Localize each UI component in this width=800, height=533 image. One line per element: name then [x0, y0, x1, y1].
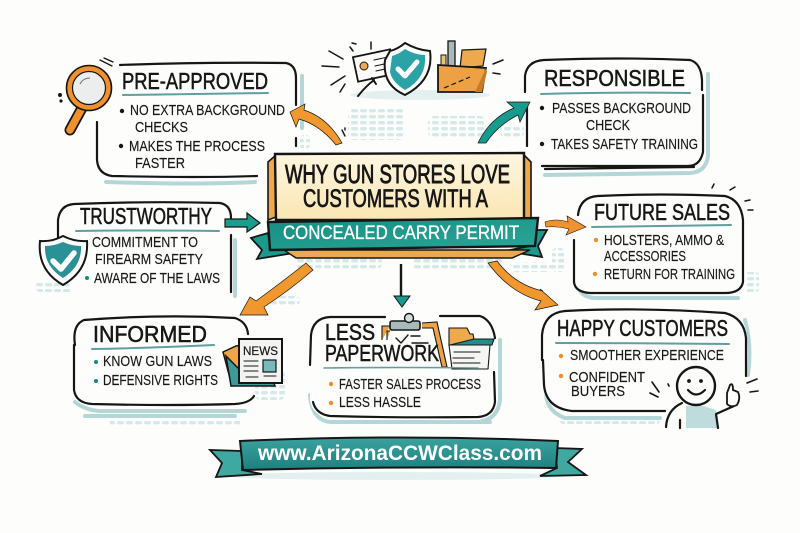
text block: future sales points: HOLSTERS, AMMO & — [604, 233, 724, 249]
text block: informed points — [103, 354, 218, 389]
icon: clipboard and folder — [381, 314, 494, 369]
text block: future sales points — [604, 233, 735, 283]
text block: pre-approved points — [129, 103, 285, 172]
icon: trustworthy shield — [40, 236, 87, 285]
icon: id card, shield and folder — [322, 41, 503, 100]
icon: smiley thumbs up — [650, 367, 758, 428]
title text — [285, 161, 510, 213]
title text: CUSTOMERS WITH A — [303, 185, 488, 213]
text block: less paperwork points — [339, 377, 481, 411]
heading: future sales: FUTURE SALES — [594, 199, 730, 225]
text block: responsible points: TAKES SAFETY TRAINING — [551, 137, 698, 153]
panel: pre-approved — [97, 63, 302, 184]
arrow: to trustworthy — [225, 213, 260, 232]
text block: future sales points: RETURN FOR TRAINING — [604, 267, 735, 283]
text block: less paperwork points: LESS HASSLE — [339, 395, 421, 411]
ribbon: concealed carry permit — [251, 218, 547, 259]
title text: WHY GUN STORES LOVE — [285, 161, 510, 189]
arrow: to informed — [240, 263, 313, 315]
ribbon: concealed carry permit: CONCEALED CARRY PERMIT — [283, 223, 519, 244]
heading: pre-approved: PRE-APPROVED — [122, 68, 268, 94]
text block: happy customers points: BUYERS — [571, 384, 625, 400]
text block: trustworthy points: FIREARM SAFETY — [95, 252, 203, 268]
text block: happy customers points: SMOOTHER EXPERIENCE — [570, 348, 724, 364]
text block: less paperwork points: FASTER SALES PROCESS — [339, 377, 481, 393]
panel: trustworthy — [58, 202, 235, 296]
heading: happy customers: HAPPY CUSTOMERS — [557, 315, 728, 341]
arrow: to future sales — [545, 216, 586, 235]
panel: less paperwork — [310, 314, 500, 422]
text block: trustworthy points — [92, 235, 220, 287]
arrow: to less paperwork — [394, 264, 410, 307]
text block: responsible points: PASSES BACKGROUND — [552, 101, 691, 117]
text block: responsible points — [551, 101, 698, 153]
text block: responsible points: CHECK — [586, 118, 630, 134]
icon: newspaper: NEWS — [243, 346, 278, 358]
heading: informed: INFORMED — [93, 321, 207, 347]
text block: trustworthy points: AWARE OF THE LAWS — [94, 271, 220, 287]
ribbon: website url: www.ArizonaCCWClass.com — [257, 441, 542, 465]
text block: informed points: DEFENSIVE RIGHTS — [103, 373, 218, 389]
arrow: to pre-approved — [290, 104, 345, 145]
icon: magnifying glass — [58, 58, 113, 130]
title panel — [251, 153, 547, 259]
arrow: to happy customers — [488, 261, 558, 310]
text block: happy customers points — [569, 348, 724, 400]
heading: trustworthy: TRUSTWORTHY — [80, 203, 212, 229]
arrow: to responsible — [478, 102, 530, 143]
text block: happy customers points: CONFIDENT — [569, 370, 645, 386]
panel: happy customers — [542, 309, 749, 418]
heading: less paperwork: PAPERWORK — [325, 340, 440, 366]
text block: pre-approved points: NO EXTRA BACKGROUND — [130, 103, 285, 119]
panel: responsible — [525, 58, 708, 175]
heading: less paperwork: LESS — [325, 319, 375, 345]
text block: informed points: KNOW GUN LAWS — [103, 354, 212, 370]
text block: pre-approved points: FASTER — [135, 156, 185, 172]
text block: future sales points: ACCESSORIES — [604, 249, 686, 265]
heading: responsible: RESPONSIBLE — [544, 65, 685, 91]
heading: less paperwork — [325, 319, 440, 366]
icon: newspaper — [223, 339, 282, 386]
ribbon: website url — [210, 438, 586, 480]
background watercolor wash — [36, 104, 759, 425]
panel: future sales — [574, 184, 753, 298]
panel: informed — [73, 316, 254, 416]
text block: trustworthy points: COMMITMENT TO — [92, 235, 198, 251]
text block: pre-approved points: CHECKS — [135, 120, 188, 136]
text block: pre-approved points: MAKES THE PROCESS — [129, 139, 265, 155]
